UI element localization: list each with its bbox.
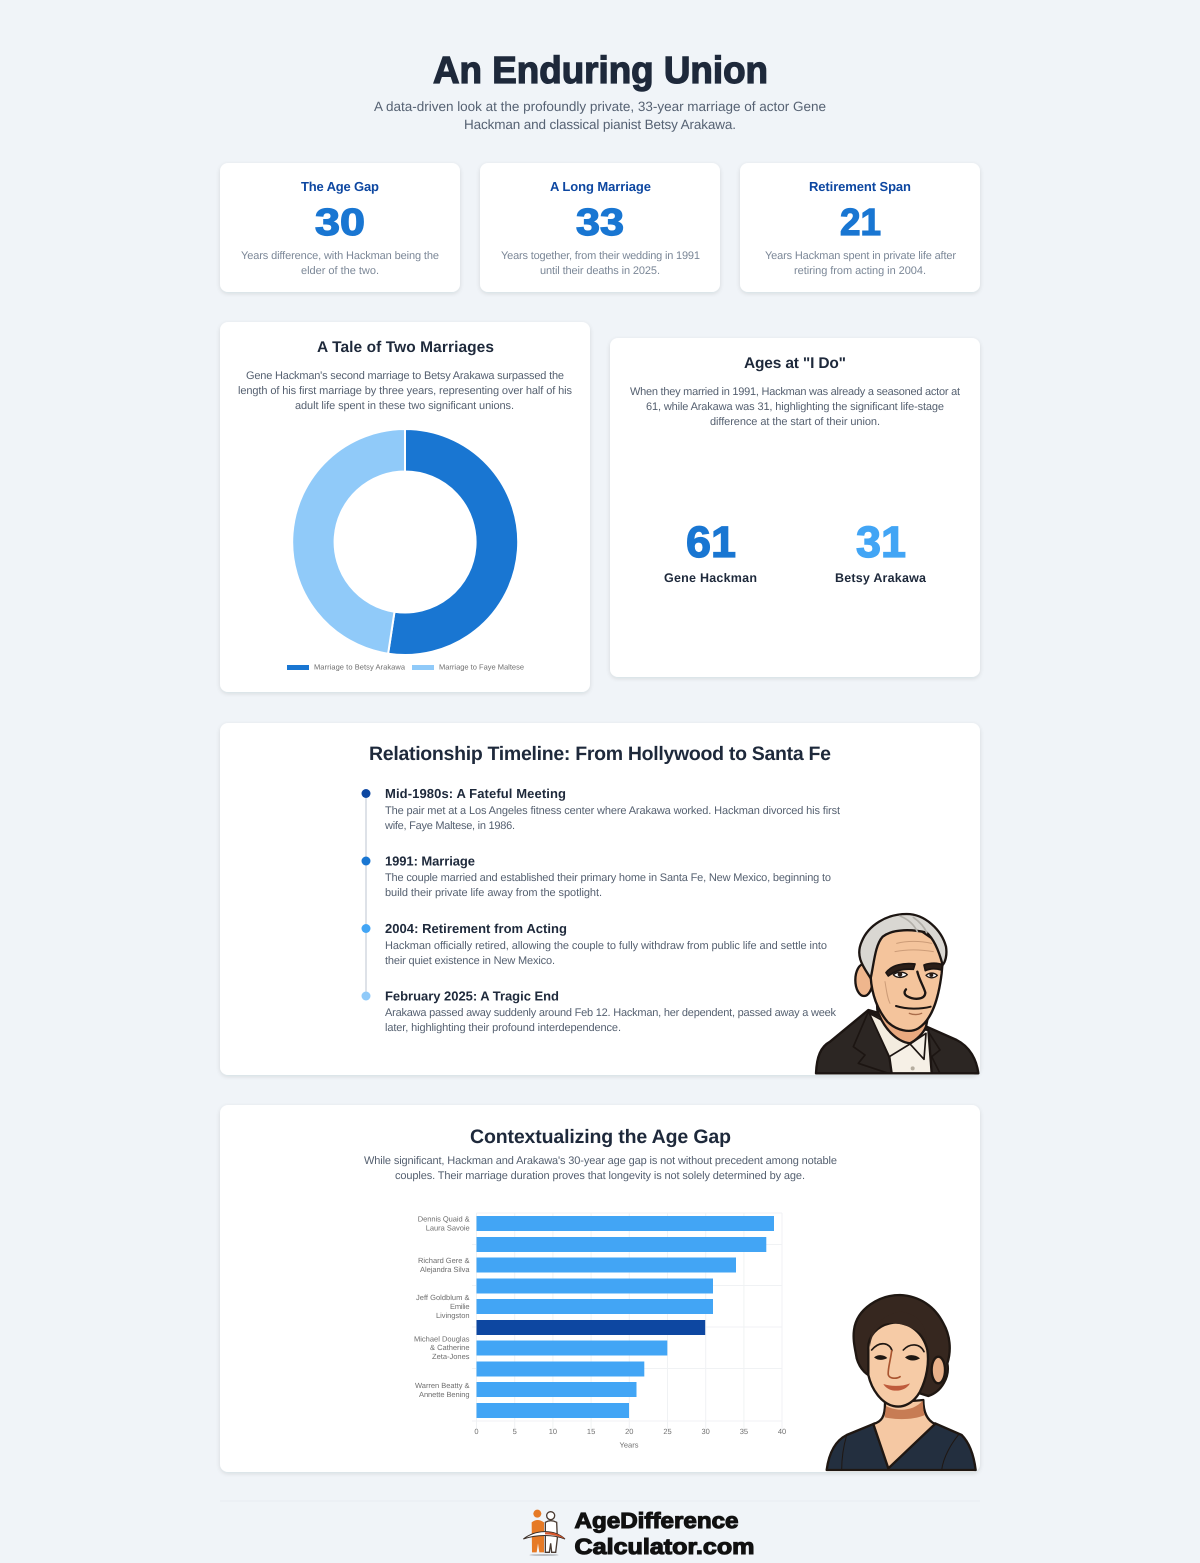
donut chart [292,429,518,655]
panel: contextualizing the age gap [220,1105,980,1472]
y-axis labels: Jeff Goldblum & [416,1293,470,1302]
stat: Gene Hackman age: Gene Hackman [664,571,757,585]
x-axis labels: 30 [702,1427,710,1436]
panel: a tale of two marriages [220,322,590,692]
y-axis labels: Richard Gere & [418,1256,470,1265]
y-axis labels: Michael Douglas [414,1334,470,1344]
y-axis labels: Emilie [450,1302,470,1311]
x-axis labels: 20 [625,1427,633,1436]
subtitle: Hackman and classical pianist Betsy Arakawa. [464,117,736,132]
y-axis labels: Alejandra Silva [420,1265,470,1274]
timeline item: 2025: Arakawa passed away suddenly around Feb 12. Hackman, her dependent, passed away a week [385,1007,836,1019]
panel: a long marriage stat [480,163,720,292]
text block: couples. Their marriage duration proves that longevity is not solely determined by age. [395,1170,805,1182]
text block: length of his first marriage by three years, representing over half of his [238,385,572,397]
text block: 61, while Arakawa was 31, highlighting the significant life-stage [646,401,944,413]
wordmark: AgeDifference [574,1508,738,1533]
title: An Enduring Union [433,50,768,92]
header [374,50,826,132]
y-axis labels: & Catherine [430,1343,470,1352]
bars [476,1216,774,1418]
stat: Betsy Arakawa age: 31 [856,518,906,567]
x-axis labels: 0 [474,1427,479,1436]
text block: difference at the start of their union. [710,416,880,428]
footer logo [523,1508,754,1559]
heading: Relationship Timeline: From Hollywood to Santa Fe [369,743,831,765]
timeline item: 2025: later, highlighting their profound interdependence. [385,1022,621,1034]
timeline item: mid-1980s [362,786,840,832]
subtitle: A data-driven look at the profoundly private, 33-year marriage of actor Gene [374,99,826,114]
x-axis labels: 15 [587,1427,595,1436]
y-axis labels: Livingston [436,1311,470,1320]
description [241,250,439,277]
number: 33: 33 [576,202,624,244]
x-axis labels: 40 [778,1427,786,1436]
x-axis labels: Years [620,1440,639,1450]
text block [364,1155,837,1182]
panel: the age gap stat [220,163,460,292]
panel: relationship timeline [220,723,980,1075]
timeline item: 2004: their quiet existence in New Mexico. [385,955,555,967]
text block: adult life spent in these two significant unions. [295,400,514,412]
timeline item: mid-1980s: wife, Faye Maltese, in 1986. [384,820,515,832]
description: retiring from acting in 2004. [794,265,926,277]
timeline item: mid-1980s: Mid-1980s: A Fateful Meeting [385,786,566,801]
icon: two figures [523,1510,565,1556]
timeline axis [365,793,367,996]
heading: the age gap: The Age Gap [301,179,379,194]
text block [630,386,960,428]
heading: a long marriage: A Long Marriage [550,179,651,194]
stat: Betsy Arakawa age: Betsy Arakawa [835,571,927,585]
subtitle [374,99,826,132]
legend [287,662,524,672]
text block [238,370,572,412]
text block: While significant, Hackman and Arakawa's 30-year age gap is not without precedent among notable [364,1155,837,1167]
description: elder of the two. [301,265,379,277]
icon: Betsy Arakawa portrait [827,1295,976,1470]
icon: Gene Hackman portrait [816,914,978,1073]
y-axis labels [414,1214,470,1399]
grid [472,1213,782,1430]
description [765,250,956,277]
heading: A Tale of Two Marriages [317,339,494,356]
description: Years difference, with Hackman being the [241,250,439,262]
wordmark [574,1508,754,1559]
stat: Betsy Arakawa age [835,518,927,585]
y-axis labels: Zeta-Jones [432,1352,470,1361]
description [501,250,700,277]
text block: When they married in 1991, Hackman was already a seasoned actor at [630,386,960,398]
timeline item: 1991: The couple married and established their primary home in Santa Fe, New Mexico, beginning to [385,872,831,884]
description: Years Hackman spent in private life after [765,250,956,262]
description: until their deaths in 2025. [540,265,660,277]
heading: retirement span: Retirement Span [809,179,911,194]
x-axis labels: 35 [740,1427,748,1436]
heading: Ages at "I Do" [744,355,846,372]
bar chart [414,1213,786,1450]
y-axis labels: Laura Savoie [426,1224,470,1232]
timeline item: 2025 [362,988,836,1034]
timeline item: 2025: February 2025: A Tragic End [385,988,559,1004]
legend: Marriage to Betsy Arakawa [314,662,406,672]
footer divider [220,1500,980,1502]
x-axis labels: 25 [663,1427,672,1436]
text block: Gene Hackman's second marriage to Betsy Arakawa surpassed the [246,370,564,382]
timeline item: 1991 [362,854,831,899]
wordmark: Calculator.com [574,1534,754,1559]
stat: Gene Hackman age: 61 [686,518,736,567]
timeline item: 1991: build their private life away from the spotlight. [385,887,602,899]
timeline item: 2004: Hackman officially retired, allowing the couple to fully withdraw from public life and settle into [385,940,827,952]
x-axis labels: 10 [549,1427,557,1436]
description: Years together, from their wedding in 1991 [501,250,700,262]
y-axis labels: Annette Bening [419,1390,470,1399]
stat: Gene Hackman age [664,518,757,585]
timeline item: 2004: 2004: Retirement from Acting [385,921,567,936]
x-axis labels [474,1427,786,1450]
number: 21: 21 [840,202,881,244]
heading: Contextualizing the Age Gap [470,1126,731,1148]
timeline item: 1991: 1991: Marriage [385,854,475,868]
panel: ages at I do [610,338,980,677]
y-axis labels: Dennis Quaid & [418,1214,470,1224]
legend: Marriage to Faye Maltese [439,662,524,672]
x-axis labels: 5 [513,1427,517,1436]
timeline item: mid-1980s: The pair met at a Los Angeles fitness center where Arakawa worked. Hackman divorced his first [385,805,840,817]
panel: retirement span stat [740,163,980,292]
number: 30: 30 [315,202,365,244]
y-axis labels: Warren Beatty & [415,1381,470,1390]
timeline item: 2004 [362,921,827,967]
